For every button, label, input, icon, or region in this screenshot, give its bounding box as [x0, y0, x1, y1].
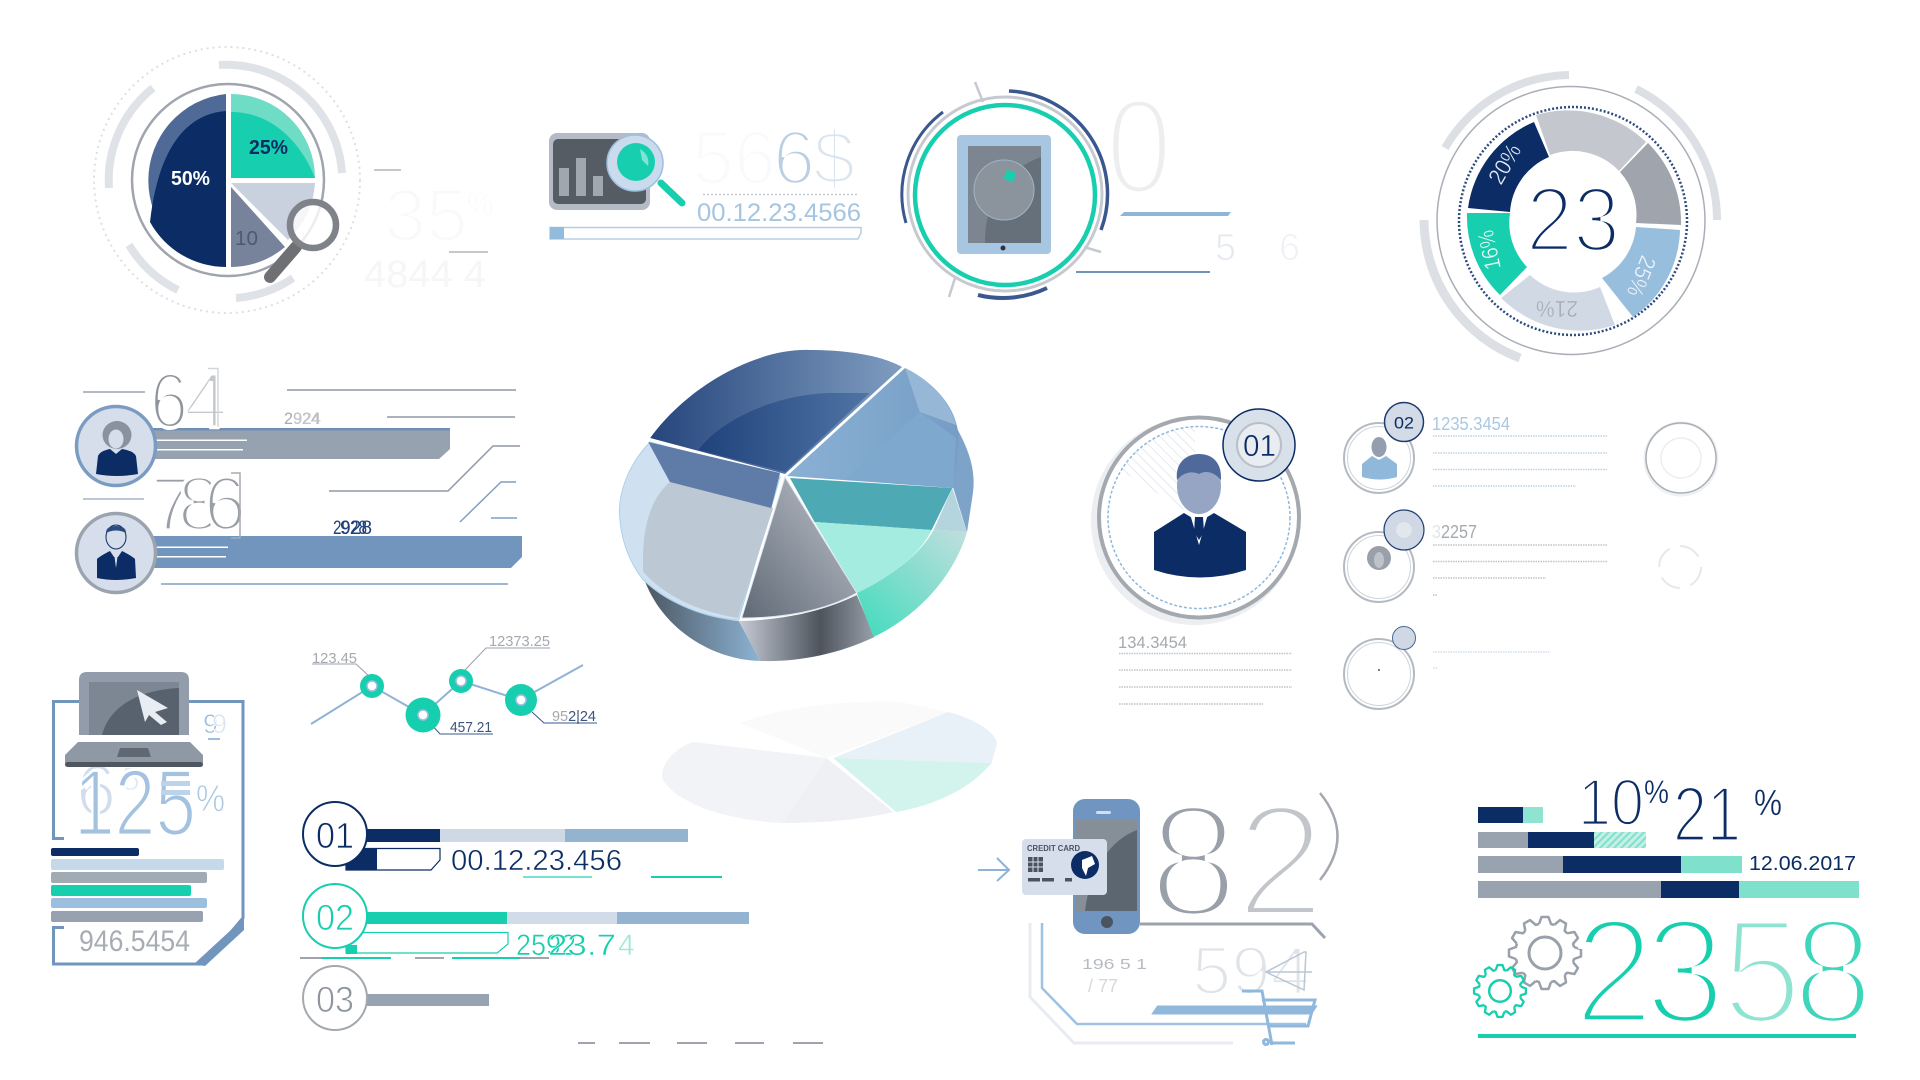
row 02 value: 2592: [516, 929, 576, 962]
navy sector: [650, 350, 902, 474]
gray segment: [1536, 110, 1646, 171]
pale segment 21%: [1501, 275, 1615, 331]
row 01 circle: 01: [316, 815, 354, 856]
progress bar: [550, 227, 861, 239]
panel: stacked bars and gears: [1474, 765, 1873, 1055]
frame corner: [194, 918, 244, 966]
badge 2: [1384, 510, 1424, 550]
value 64: 4: [184, 356, 227, 444]
lines 1: [1433, 436, 1607, 486]
value 666$: $: [813, 116, 855, 201]
base lines: [1030, 923, 1325, 1043]
teal sector: [231, 94, 315, 178]
teal underline: [1478, 1034, 1856, 1038]
blue sector: [787, 368, 959, 488]
icon: credit card: CREDIT CARD: [1027, 844, 1080, 853]
panel: mobile payment: [978, 771, 1338, 1045]
row 01 value: 00.12.23.456: [451, 845, 622, 877]
icon: magnifier: [270, 202, 336, 277]
row 02 value: 23.7: [548, 929, 616, 962]
pie outline ring: [132, 84, 324, 276]
value 10%: 10: [1578, 765, 1644, 839]
panel: donut 23: [1424, 75, 1717, 358]
badge 02: 02: [1394, 414, 1414, 432]
right gray circle: [1645, 423, 1717, 495]
blue rule lower: [1076, 271, 1210, 273]
bottom dashes: [578, 1042, 823, 1044]
value 2358: [1574, 887, 1873, 1055]
thin ring: [1437, 86, 1705, 354]
row 03 circle: [303, 966, 367, 1030]
value 2928: 2928: [333, 518, 367, 539]
light gray sector: [231, 183, 315, 240]
value 21%: %: [1754, 782, 1782, 823]
blue segment 25%: [1602, 227, 1680, 317]
labels: 457.21: [450, 719, 492, 736]
pale side facet: [934, 488, 967, 532]
ghost value 35%: [364, 174, 494, 296]
value 9: 9: [203, 709, 218, 739]
value 21%: 21: [1673, 770, 1741, 858]
item 1 circle: [1344, 423, 1414, 493]
panel: top-left pie chart: [94, 47, 494, 313]
small values: / 77: [1088, 976, 1118, 996]
blue segment 25%: 25%: [1622, 252, 1661, 301]
panel: dashboard search: [549, 116, 861, 239]
value 594: 594: [1192, 933, 1310, 1009]
value 786: 8: [178, 462, 220, 547]
value 786: 6: [204, 462, 246, 547]
ghost value 35%: 4844 4: [364, 254, 486, 296]
gray wedge sector: [231, 187, 285, 267]
side: middle slice: [739, 595, 875, 661]
ghost values 5 and 6: 6: [1279, 227, 1300, 269]
leader lines: [312, 648, 597, 734]
icon: cart: [1154, 991, 1315, 1045]
value 2928: 928: [340, 518, 372, 539]
value 125%: 6: [76, 751, 116, 831]
trend line: [311, 665, 583, 724]
arrow: [978, 858, 1009, 881]
center value 23: 23: [1526, 169, 1620, 271]
value 666$: 6: [773, 116, 815, 201]
value 666$: 56: [692, 116, 776, 201]
short tick lines: [374, 170, 488, 252]
row 02 value: [516, 929, 635, 962]
icon: chart board: [549, 133, 650, 210]
icon: gray gear: [1509, 917, 1581, 989]
value 2358: 5: [1722, 887, 1802, 1055]
blue bar: [150, 536, 522, 568]
value 1235.3454: 1235.3454: [1432, 414, 1510, 434]
value 946.5454: 946.5454: [79, 925, 190, 958]
value 125%: %: [196, 778, 225, 820]
faint dashed circle: [1659, 546, 1701, 588]
outer arcs: [1424, 75, 1717, 358]
teal band sector: [790, 478, 952, 530]
row 03 bar: [367, 994, 489, 1006]
connector lines: [83, 390, 520, 584]
value 82: 8: [1149, 771, 1238, 950]
light teal sector: [815, 522, 932, 593]
ghost value 35%: %: [467, 188, 494, 221]
labels: 952|24: [552, 708, 596, 725]
small values: 196 5 1: [1082, 956, 1147, 973]
row 02 circle: 02: [316, 897, 354, 938]
value 786: [151, 462, 246, 547]
left gray-blue inner: [643, 482, 773, 618]
outer thick arcs: [109, 65, 342, 298]
panel: profile list: [1344, 402, 1717, 709]
point centres: [367, 676, 526, 720]
badge 01: 01: [1243, 428, 1276, 463]
value 2358: 2: [1574, 887, 1654, 1055]
row 02 circle: [303, 884, 367, 948]
ghost value 35%: 35: [384, 174, 468, 257]
gray ring: [908, 82, 1102, 297]
row 01 bar: [367, 829, 688, 842]
gray wedge: [742, 477, 857, 618]
stacked bars: [1478, 807, 1859, 898]
teal ring: [915, 105, 1095, 285]
value 134.3454: 134.3454: [1118, 633, 1187, 652]
value 82: 2: [1236, 771, 1325, 950]
badge 01: [1223, 409, 1295, 481]
icon: phone: [1073, 799, 1140, 934]
icon: tablet: [957, 135, 1051, 254]
chart: line with teal points: [311, 633, 597, 736]
icon: teal magnifier: [607, 135, 682, 203]
navy inner sector: [698, 393, 870, 472]
teal segment 16%: [1467, 213, 1527, 295]
row 01 sub bar: [346, 848, 440, 870]
profile ring: [1091, 417, 1299, 625]
side: dark slice: [645, 582, 760, 661]
value 10%: %: [1644, 774, 1669, 810]
value 2358: 8: [1793, 887, 1873, 1055]
ghost values 5 and 6: 5: [1215, 227, 1236, 269]
value 9: 9: [212, 709, 227, 739]
chart: 3D pie: [619, 350, 974, 661]
value 2924: 924: [293, 409, 321, 428]
navy half sector: [148, 94, 226, 267]
value 125%: 5: [122, 761, 140, 797]
small values: [1082, 956, 1147, 996]
item 3 circle: [1344, 639, 1414, 709]
teal segment 16%: 16%: [1472, 228, 1506, 272]
value 125%: 125: [74, 750, 196, 855]
blue sector highlight: [905, 368, 956, 425]
label 10: 10: [235, 228, 258, 250]
dashed fragments: [300, 957, 549, 959]
value 32257: 32257: [1432, 522, 1477, 542]
panel: man profile: [1091, 409, 1299, 704]
icon: laptop: [65, 672, 203, 767]
dotted lines: [1119, 654, 1292, 704]
lines 3: [1433, 652, 1550, 668]
value 9: [203, 709, 227, 739]
icon: paper plane: [1266, 952, 1312, 990]
navy arcs: [902, 91, 1108, 298]
pale segment 21%: 21%: [1536, 296, 1578, 322]
dark gray segment: [1620, 143, 1681, 225]
icon: man: [1154, 454, 1246, 578]
label 25%: 25%: [249, 137, 288, 159]
ghost values 5 and 6: [1215, 227, 1300, 269]
date: 12.06.2017: [1749, 853, 1856, 875]
panel: people bars: [76, 356, 522, 592]
right side slice: [953, 427, 974, 532]
panel: tablet ring: [902, 71, 1300, 298]
bars: [51, 848, 224, 922]
value 2358: 3: [1645, 887, 1725, 1055]
badge 02: [1384, 402, 1424, 442]
avatar: man: [76, 514, 156, 592]
labels: 12373.25: [489, 633, 550, 650]
dotted divider: [703, 194, 858, 196]
blue rule: [1120, 212, 1231, 216]
row 02 sub bar: [346, 932, 508, 954]
chart: pie reflection: [662, 702, 997, 823]
frame: [54, 702, 243, 964]
value 2924: 2924: [284, 409, 320, 428]
item 2 circle: [1344, 532, 1414, 602]
label 50%: 50%: [171, 168, 210, 190]
outer dotted ring: [94, 47, 360, 313]
date value: 00.12.23.4566: [697, 199, 861, 227]
teal fragments: [523, 876, 722, 878]
row 02 value: 4: [618, 929, 635, 962]
navy segment 20%: [1468, 122, 1549, 212]
value 64: [150, 356, 227, 444]
panel: laptop report: [51, 672, 244, 966]
value 64: 6: [150, 356, 188, 444]
value 666$: [692, 116, 855, 201]
labels: 123.45: [312, 650, 357, 667]
dotted ring: [1459, 107, 1687, 335]
blue sector inner shade: [845, 412, 956, 488]
left pale sector: [619, 442, 780, 620]
value 786: 7: [151, 462, 193, 547]
icon: teal gear: [1474, 965, 1526, 1017]
side: teal slice: [857, 530, 967, 637]
row 03 circle: 03: [316, 979, 354, 1020]
value 82: [1149, 771, 1338, 950]
panel: numbered bars: [300, 802, 823, 1043]
lines 2: [1433, 545, 1607, 595]
labels: [312, 633, 596, 736]
icon: credit card: [1022, 839, 1107, 895]
row 01 circle: [303, 802, 367, 866]
ghost value 0: 0: [1106, 71, 1172, 222]
badge 3: [1392, 626, 1416, 650]
row 02 bar: [367, 912, 749, 924]
gray bar: [150, 428, 450, 459]
blue band on left sector: [648, 442, 780, 508]
avatar: woman: [76, 406, 156, 486]
navy segment 20%: 20%: [1483, 139, 1526, 188]
data points: [360, 669, 537, 732]
